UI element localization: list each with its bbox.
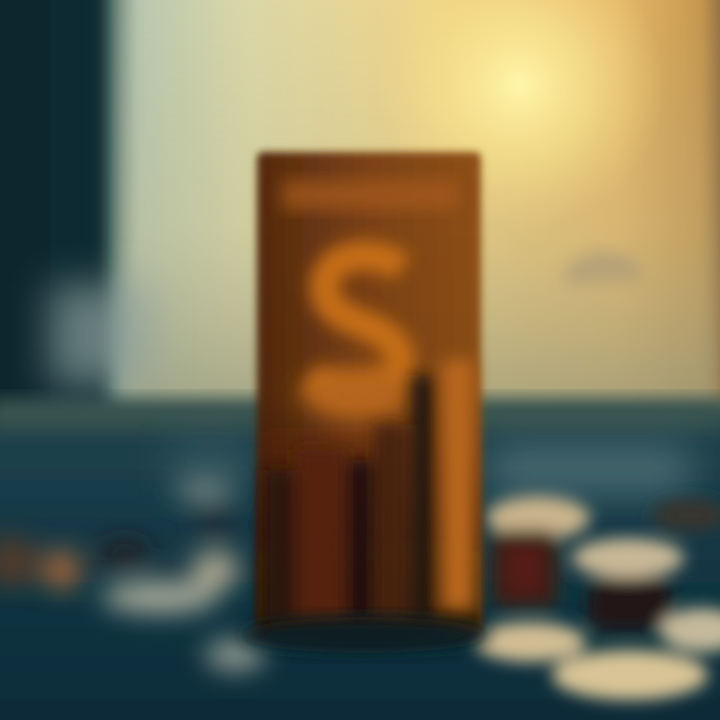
table reflections, right: [170, 440, 690, 495]
coins right: [474, 496, 720, 700]
lower chart glow: [303, 369, 413, 421]
glowing light spot: [375, 0, 665, 230]
smudge on wall, right: [565, 251, 640, 285]
table surface: [0, 398, 720, 720]
dark left panel: [0, 0, 105, 430]
book body: [257, 152, 481, 632]
book base shadow: [240, 617, 490, 653]
coins left: [0, 480, 265, 671]
chart bars: [265, 360, 474, 620]
dollar sign: [310, 256, 402, 390]
book top title band: [282, 180, 457, 210]
book with dollar sign and bars: [240, 152, 490, 653]
background wall: [0, 0, 720, 430]
blurred glass object, left: [45, 285, 150, 510]
book lower shade: [257, 152, 481, 632]
